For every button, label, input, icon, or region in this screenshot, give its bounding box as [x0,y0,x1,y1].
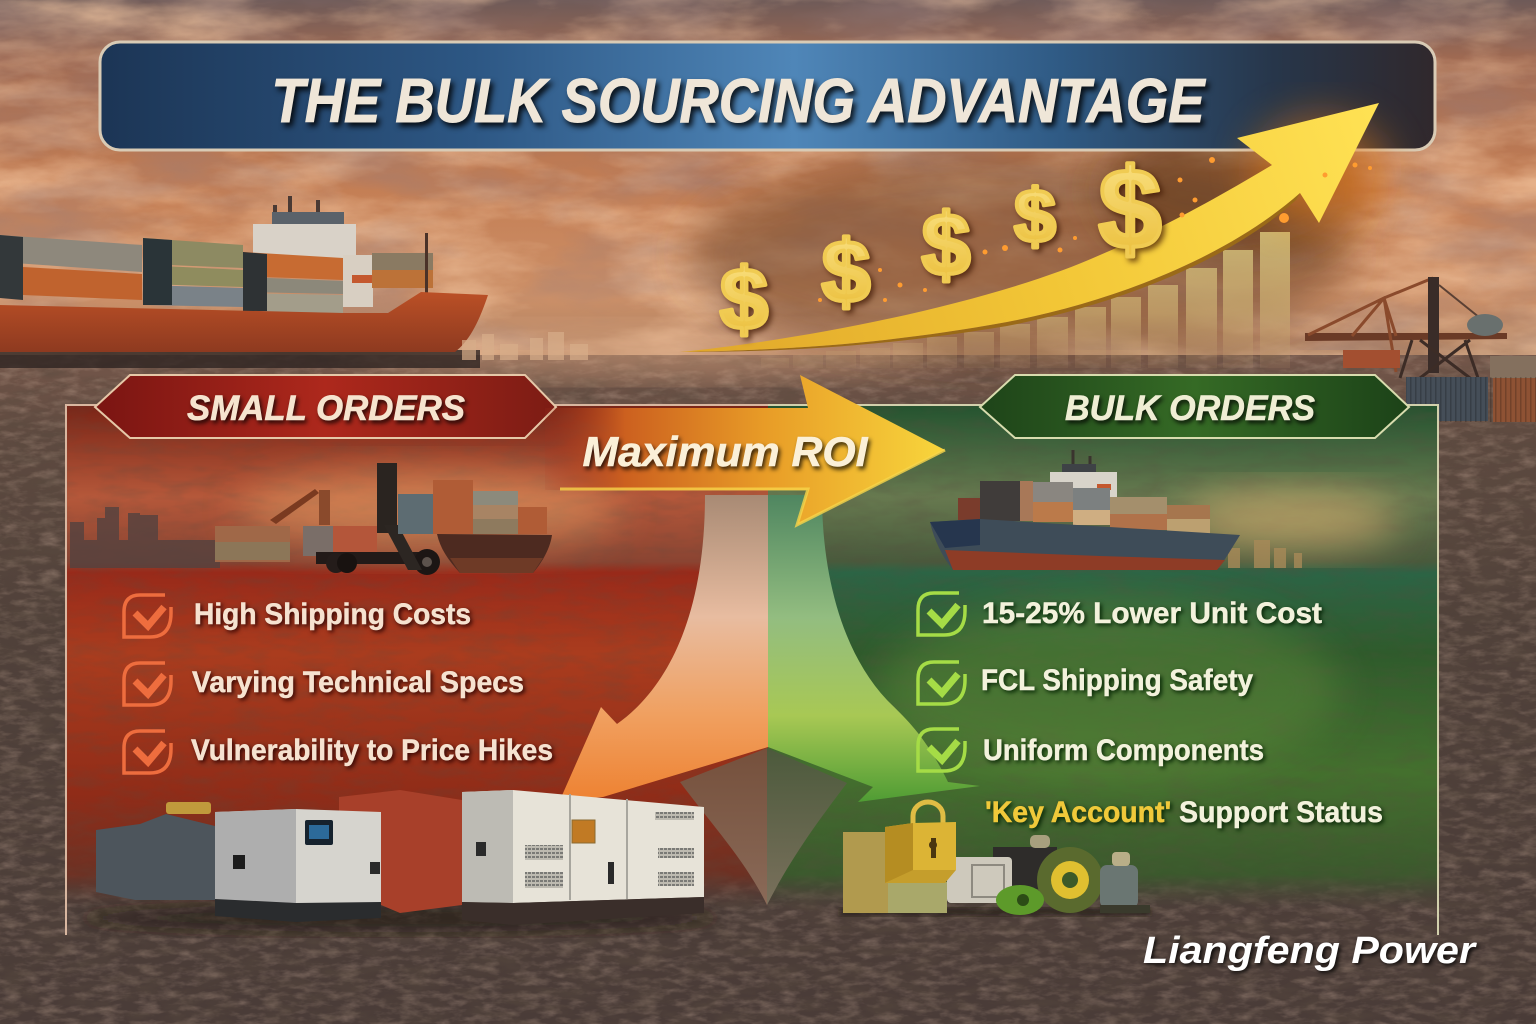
dollar signs: $ [922,195,970,294]
panel: small orders [66,405,768,945]
lower kite shape [680,748,847,905]
title banner [100,42,1435,150]
maximum ROI arrow: Maximum ROI [582,428,869,475]
small orders ribbon banner: SMALL ORDERS [187,389,465,428]
large gear [1037,847,1103,913]
check item: FCL Shipping Safety: FCL Shipping Safety [981,664,1253,697]
white generator [462,790,704,903]
small orders port scene [70,463,620,575]
white box [947,857,1012,903]
check item: Vulnerability to Price Hikes [124,731,553,773]
bulk orders container ship [930,450,1400,570]
sparks [818,157,1372,302]
grey container [96,814,215,900]
bottle [1100,865,1138,908]
check item: High Shipping Costs: High Shipping Costs [194,598,471,631]
dollar signs [720,146,1162,348]
check item: FCL Shipping Safety [918,662,1253,704]
rising yellow growth arrow [680,103,1390,352]
maximum ROI arrow [545,375,945,525]
distant city skyline [462,332,588,360]
brand watermark: Liangfeng Power [1143,930,1477,972]
yellow container [843,832,888,913]
port crane at right [1305,277,1536,422]
small orders ribbon banner [95,375,556,438]
small orders checklist [124,595,553,773]
grey generator [215,809,381,903]
check item: Varying Technical Specs: Varying Technical Specs [192,666,524,699]
dollar signs: $ [1014,174,1056,258]
check item: 15-25% Lower Unit Cost [918,593,1322,635]
check item: Uniform Components: Uniform Components [983,734,1264,767]
bulk orders ribbon banner [980,375,1409,438]
left arrow down to small orders [560,495,768,800]
check item: 15-25% Lower Unit Cost: 15-25% Lower Unit Cost [982,597,1322,630]
check item: Varying Technical Specs [124,663,524,705]
bar chart rising behind arrow [761,232,1290,368]
panel: bulk orders [768,405,1438,945]
dollar signs: $ [1098,146,1162,273]
bulk orders ribbon banner: BULK ORDERS [1065,389,1315,428]
dollar signs: $ [720,251,768,348]
check item: Uniform Components [918,729,1264,771]
red container [339,790,462,913]
title text: THE BULK SOURCING ADVANTAGE [272,67,1206,136]
dollar signs: $ [822,222,870,321]
padlock [913,802,943,826]
small green gear [996,885,1044,915]
check item: High Shipping Costs [124,595,471,637]
right arrow down to bulk orders [768,495,980,802]
yellow tarp behind grey container [166,802,211,814]
item: Key Account Support Status: 'Key Account' Support Status [985,796,1383,829]
generators and containers, left [80,790,720,932]
bulk orders checklist [918,593,1322,771]
cargo ship on the horizon [0,196,488,352]
check item: Vulnerability to Price Hikes: Vulnerability to Price Hikes [191,734,553,767]
padlock, container and parts, right [840,802,1150,916]
dark crate [993,847,1057,889]
central funnel arrows [560,495,980,905]
